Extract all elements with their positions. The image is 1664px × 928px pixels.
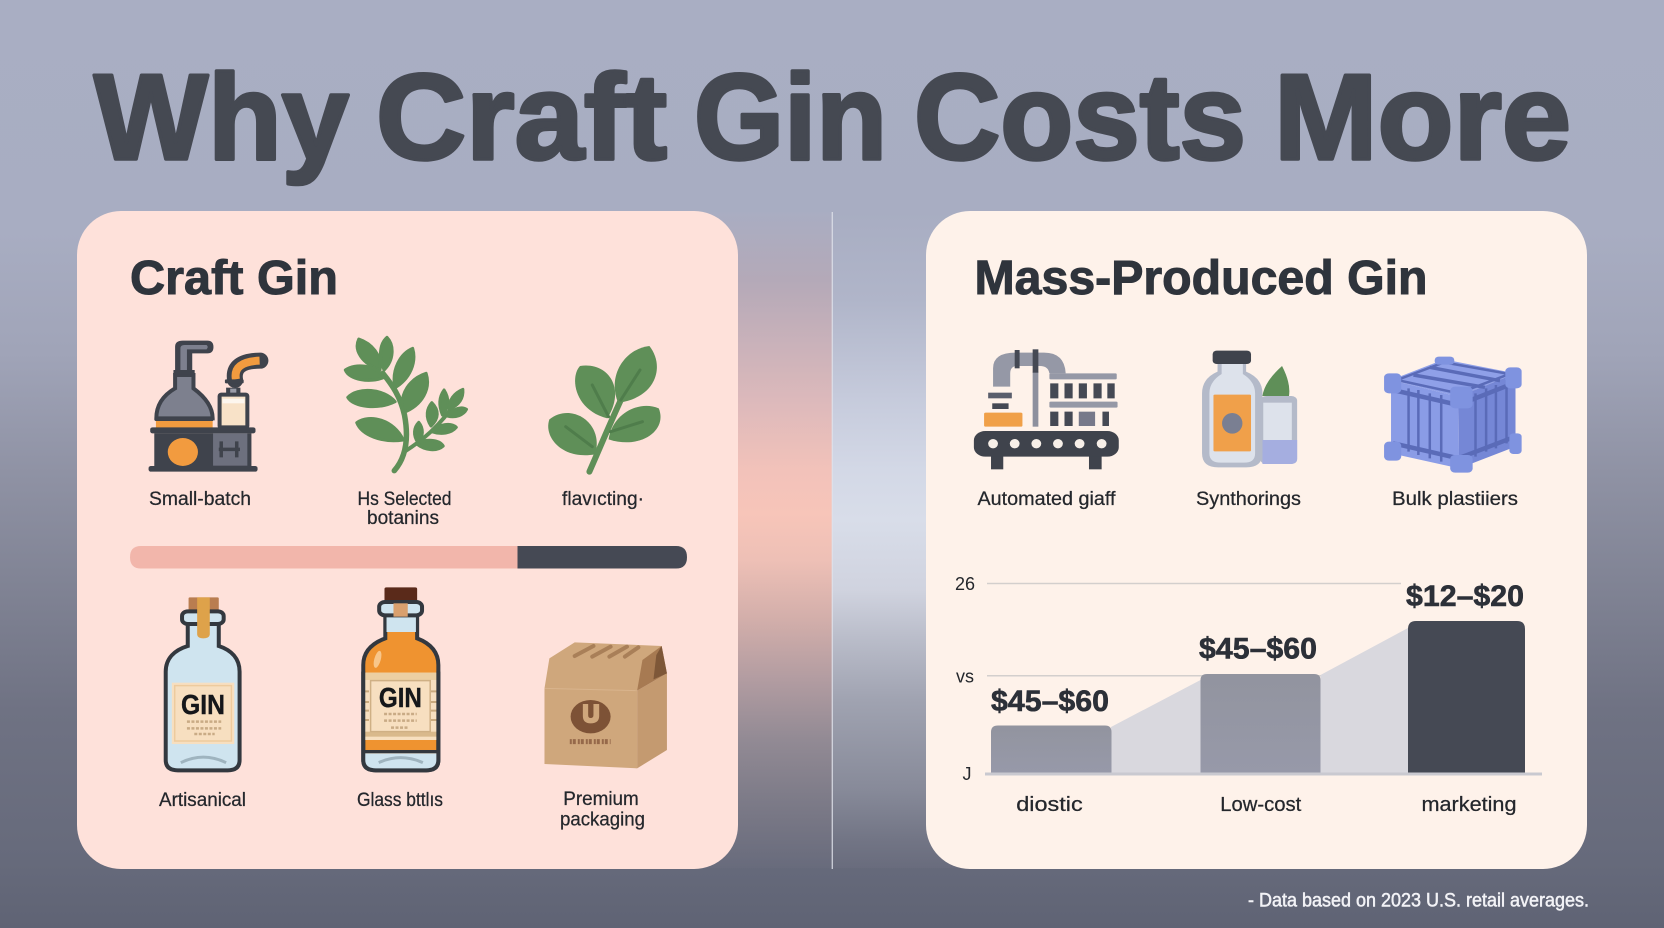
label: automated staff: Automated giaff	[978, 489, 1116, 510]
icon: botanical sprig	[345, 337, 467, 471]
connector shading	[1111, 628, 1408, 773]
title: More	[1274, 49, 1571, 185]
icon: clear gin bottle	[166, 597, 240, 770]
label: small-batch: Small-batch	[149, 489, 251, 510]
chart baseline	[985, 772, 1542, 776]
label: selected botanicals: botanins	[367, 508, 439, 529]
title: Why	[94, 49, 349, 185]
label: synthetic flavourings: Synthorings	[1196, 489, 1301, 510]
label: premium packaging: Premium	[563, 789, 639, 810]
icon: green leaves	[548, 346, 661, 472]
footnote: - Data based on 2023 U.S. retail averages.	[1248, 890, 1589, 912]
bar chart: price comparison	[955, 574, 1542, 816]
value: second: $45–$60	[1199, 632, 1317, 666]
label: glass bottles: Glass bttlıs	[357, 790, 443, 811]
category: third: marketing	[1422, 794, 1516, 816]
icon: synthetic flavour bottles	[1202, 351, 1297, 467]
icon: amber gin bottle	[362, 587, 439, 770]
heading: mass-produced gin: Mass-Produced Gin	[974, 252, 1428, 305]
label: premium packaging: packaging	[560, 810, 645, 830]
axis label: middle: vs	[956, 666, 974, 686]
label: selected botanicals	[358, 489, 452, 529]
title	[94, 49, 1571, 185]
label: bulk plastic: Bulk plastiiers	[1392, 489, 1518, 510]
category: second: Low-cost	[1220, 794, 1302, 816]
axis label: bottom: J	[962, 764, 972, 784]
bottle label text: GIN	[181, 689, 225, 720]
value: first: $45–$60	[991, 685, 1109, 718]
category: first: diostic	[1016, 794, 1083, 816]
bottle label text: GIN	[379, 682, 422, 713]
icon: factory conveyor	[974, 349, 1119, 469]
bar: first	[991, 726, 1112, 773]
progress bar	[130, 546, 687, 568]
bar: third	[1408, 621, 1525, 773]
panel: mass-produced gin	[926, 211, 1587, 869]
label: selected botanicals: Hs Selected	[358, 489, 452, 510]
icon: premium box	[544, 642, 667, 768]
title: Gin	[694, 49, 887, 185]
icon: bulk crate	[1384, 357, 1522, 473]
title: Costs	[914, 49, 1246, 185]
label: artisanal: Artisanical	[159, 790, 246, 811]
label: flavouring: flavıcting·	[562, 489, 644, 510]
panel: craft gin	[77, 211, 738, 869]
axis label: top: 26	[955, 574, 975, 594]
value: third: $12–$20	[1406, 580, 1524, 613]
heading: craft gin: Craft Gin	[130, 252, 338, 305]
title: Craft	[376, 49, 667, 185]
bar: second	[1200, 674, 1320, 773]
label: premium packaging	[560, 789, 645, 830]
icon: copper still	[149, 341, 260, 472]
